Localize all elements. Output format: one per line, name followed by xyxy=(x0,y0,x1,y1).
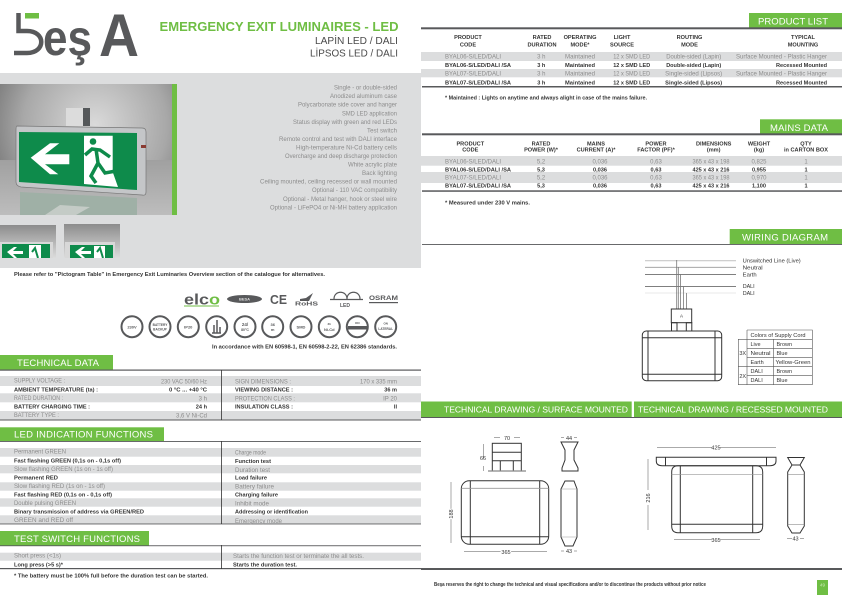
disclaimer: Beşa reserves the right to change the technical and visual specifications and/or to discontinue the products without prior notice xyxy=(434,582,706,588)
panel: mains data: MAINS xyxy=(587,141,605,147)
dimensions: 188 xyxy=(449,509,455,519)
feature list: Overcharge and deep discharge protection xyxy=(285,154,397,160)
panel: product list: 12 x SMD LED xyxy=(613,72,651,78)
wire labels: DALI xyxy=(743,291,755,297)
dimensions: 43 xyxy=(566,549,572,555)
panel: mains data: 1 xyxy=(804,184,808,190)
panel: mains data: POWER xyxy=(645,141,667,147)
supply cord colour table: DALI xyxy=(750,369,763,375)
supply cord colour table: Blue xyxy=(776,351,788,357)
panel: technical data: AMBIENT TEMPERATURE (ta) : xyxy=(14,388,98,394)
panel: technical data: 0 °C ... +40 °C xyxy=(169,388,207,394)
panel: mains data: BYAL06-S/LED/DALI xyxy=(445,160,501,166)
panel: mains data: 1 xyxy=(804,175,808,181)
panel: product list: 12 x SMD LED xyxy=(613,63,650,69)
panel: LED indication functions: Charging failure xyxy=(235,493,278,499)
panel: LED indication functions: Slow flashing RED (1s on - 1s off) xyxy=(14,484,105,490)
panel: LED indication functions: Inhibit mode xyxy=(235,502,270,508)
panel: mains data: PRODUCT xyxy=(456,141,485,147)
dimensions xyxy=(449,436,577,556)
panel: mains data: 0,036 xyxy=(593,184,607,190)
panel: product list: Surface Mounted - Plastic Hanger xyxy=(736,72,827,78)
panel: product list: MODE xyxy=(681,42,698,48)
panel: technical data: RATED DURATION : xyxy=(14,396,63,402)
panel: mains data: 0,036 xyxy=(593,167,607,173)
feature list: Anodized aluminum case xyxy=(330,94,398,100)
panel: mains data: RATED xyxy=(532,141,550,147)
panel: technical data: SUPPLY VOLTAGE : xyxy=(14,379,65,385)
panel: test switch functions: Starts the duration test. xyxy=(233,562,297,568)
panel: mains data: 0,63 xyxy=(650,175,662,181)
title: LİPSOS LED / DALI xyxy=(310,46,398,60)
panel: mains data: QTY xyxy=(800,141,812,147)
panel: technical data: 230 VAC 50/60 Hz xyxy=(161,380,207,386)
panel: mains data: 1 xyxy=(804,160,808,166)
heading: product list: PRODUCT LIST xyxy=(758,16,828,28)
battery footnote: * The battery must be 100% full before the duration test can be started. xyxy=(14,574,208,580)
heading: LED indication functions xyxy=(0,427,164,441)
panel: product list: Recessed Mounted xyxy=(776,80,828,86)
panel: product list: DURATION xyxy=(527,42,557,48)
heading: technical drawing surface mounted xyxy=(421,402,632,417)
pictogram icons: ON xyxy=(383,322,388,326)
panel: product list: BYAL07-S/LED/DALI /SA xyxy=(445,80,511,86)
feature list: Status display with green and red LEDs xyxy=(293,120,397,126)
panel: product list: Single-sided (Lipsos) xyxy=(665,72,722,78)
supply cord colour table: Neutral xyxy=(750,351,770,357)
wiring schematic xyxy=(642,260,736,381)
panel: mains data: (mm) xyxy=(707,147,721,153)
panel: product list: Maintained xyxy=(565,80,596,86)
dimensions: 43 xyxy=(792,536,799,542)
panel: mains data: 1,100 xyxy=(752,184,766,190)
panel: mains data: DIMENSIONS xyxy=(696,141,732,147)
panel: LED indication functions xyxy=(0,427,421,525)
panel: mains data: BYAL07-S/LED/DALI xyxy=(445,175,501,181)
product photo xyxy=(0,84,177,215)
panel: product list xyxy=(421,13,842,102)
panel: LED indication functions: Charge mode xyxy=(235,451,267,457)
panel: technical data: II xyxy=(394,405,397,411)
dimensions: 216 xyxy=(646,493,652,503)
technical drawing: surface mounted xyxy=(449,436,578,556)
panel: mains data: 0,63 xyxy=(650,160,662,166)
pictogram icons: IP20 xyxy=(184,324,193,330)
panel: product list: MOUNTING xyxy=(788,42,818,48)
heading: technical drawing recessed mounted xyxy=(634,402,842,417)
pictogram icons: ON xyxy=(355,321,360,325)
panel: technical data xyxy=(0,355,421,420)
wire labels: DALI xyxy=(743,284,755,290)
panel: mains data: BYAL06-S/LED/DALI /SA xyxy=(445,167,511,173)
pictogram icons: BATTERY xyxy=(153,323,168,327)
pictogram icons: BACKUP xyxy=(153,328,168,332)
panel: product list: TYPICAL xyxy=(791,35,816,41)
panel: LED indication functions: Function test xyxy=(235,459,271,465)
panel: technical data: SIGN DIMENSIONS : xyxy=(235,380,291,386)
panel: LED indication functions: Battery failure xyxy=(235,485,275,491)
panel: LED indication functions: Load failure xyxy=(235,476,267,482)
feature list: SMD LED application xyxy=(342,111,397,117)
panel: LED indication functions: Addressing or identification xyxy=(235,509,309,515)
panel: mains data: (kg) xyxy=(754,147,764,153)
panel: LED indication functions: GREEN and RED off xyxy=(14,518,73,524)
dimensions: 70 xyxy=(504,436,510,442)
feature list: Polycarbonate side cover and hanger xyxy=(298,103,397,109)
panel: technical data: 3,6 V Ni-Cd xyxy=(176,413,207,419)
certification logos: elc o xyxy=(184,292,220,308)
panel: mains data: * Measured under 230 V mains. xyxy=(445,200,530,206)
panel: mains data: WEIGHT xyxy=(748,141,771,147)
panel: mains data: 365 x 43 x 198 xyxy=(692,160,730,166)
panel: technical data: 3 h xyxy=(199,396,207,402)
panel: mains data: 0,63 xyxy=(651,167,661,173)
panel: product list: BYAL06-S/LED/DALI xyxy=(445,54,501,60)
pictogram icons: Ni-Cd xyxy=(324,327,335,332)
panel: mains data: 5,2 xyxy=(537,175,546,181)
panel: product list: ROUTING xyxy=(677,35,702,41)
title xyxy=(160,19,398,60)
pictogram icons xyxy=(122,316,396,337)
panel: product list: BYAL06-S/LED/DALI /SA xyxy=(445,63,511,69)
panel: mains data: BYAL07-S/LED/DALI /SA xyxy=(445,184,511,190)
pictogram icons: 3h xyxy=(328,322,331,326)
panel: product list: 3 h xyxy=(537,63,546,69)
wire labels: Neutral xyxy=(743,266,763,272)
supply cord colour table xyxy=(738,330,812,385)
supply cord colour table: Brown xyxy=(776,369,792,375)
feature list: White acrylic plate xyxy=(348,163,398,169)
panel: wiring diagram xyxy=(422,229,842,385)
panel: product list: BYAL07-S/LED/DALI xyxy=(445,72,501,78)
pictogram icons: 80°C xyxy=(241,328,249,332)
panel: mains data: POWER (W)* xyxy=(524,147,559,153)
panel: technical data: 170 x 335 mm xyxy=(360,380,397,386)
panel: product list: Maintained xyxy=(565,63,596,69)
panel: technical data: BATTERY CHARGING TIME : xyxy=(14,405,90,411)
dimensions: 44 xyxy=(566,436,572,442)
heading: test switch functions xyxy=(0,531,149,546)
panel: product list: Double-sided (Lapin) xyxy=(666,54,721,60)
logo: Beşa xyxy=(14,2,139,69)
supply cord colour table: Earth xyxy=(750,360,764,366)
panel: technical data: INSULATION CLASS : xyxy=(235,405,293,411)
panel: mains data: 425 x 43 x 216 xyxy=(692,184,730,190)
panel: product list: Surface Mounted - Plastic Hanger xyxy=(736,54,827,60)
panel: product list: * Maintained : Lights on anytime and always alight in case of the mains failure. xyxy=(445,96,647,102)
panel: grey product panel xyxy=(0,73,421,268)
panel: product list: CODE xyxy=(460,42,476,48)
thumbnail: recessed mounted xyxy=(64,224,120,258)
panel: product list: SOURCE xyxy=(610,42,634,48)
panel: product list: Double-sided (Lapin) xyxy=(666,63,721,69)
heading: mains data xyxy=(760,119,842,134)
pictogram icons: 24/ xyxy=(242,322,249,327)
pictogram icons: SMD xyxy=(297,324,306,330)
heading: technical data: TECHNICAL DATA xyxy=(17,358,100,369)
heading: LED indication functions: LED INDICATION FUNCTIONS xyxy=(14,430,153,440)
panel: mains data: 365 x 43 x 198 xyxy=(692,175,730,181)
panel: test switch functions: Starts the function test or terminate the all tests. xyxy=(233,554,364,560)
pictogram icons: m xyxy=(271,327,275,332)
heading: technical drawing recessed mounted: TECHNICAL DRAWING / RECESSED MOUNTED xyxy=(638,404,828,414)
heading: technical data xyxy=(0,355,113,370)
supply cord colour table: Blue xyxy=(776,378,788,384)
panel: LED indication functions: Permanent GREEN xyxy=(14,450,66,456)
panel: product list: Maintained xyxy=(565,54,595,60)
certification logos: RoHS xyxy=(295,302,318,308)
heading: product list xyxy=(749,13,842,28)
panel: test switch functions: Short press (<1s) xyxy=(14,553,61,559)
supply cord colour table: 2X xyxy=(739,374,746,380)
panel: product list: LIGHT xyxy=(614,35,631,41)
dimensions: 365 xyxy=(711,538,721,544)
panel: mains data: 0,970 xyxy=(751,175,767,181)
panel: test switch functions: Long press (>5 s)* xyxy=(14,562,64,568)
heading: wiring diagram: WIRING DIAGRAM xyxy=(742,232,828,244)
panel: technical data: VIEWING DISTANCE : xyxy=(235,388,293,394)
panel: mains data: 0,63 xyxy=(651,184,661,190)
panel: product list: MODE* xyxy=(571,42,590,48)
certification logos xyxy=(184,292,398,309)
certification logos: OSRAM xyxy=(369,295,398,302)
panel: product list: 3 h xyxy=(537,80,546,86)
panel: mains data: in CARTON BOX xyxy=(784,147,828,153)
panel: mains data: 0,955 xyxy=(752,167,766,173)
dimensions: 365 xyxy=(501,550,511,556)
dimensions: 425 xyxy=(711,446,721,452)
panel: LED indication functions: Slow flashing GREEN (1s on - 1s off) xyxy=(14,467,113,473)
pictogram icons: 230V xyxy=(127,324,137,330)
feature list: Optional - LiFePO4 or Ni-MH battery application xyxy=(270,205,397,211)
panel: LED indication functions: Fast flashing RED (0,1s on - 0,1s off) xyxy=(14,493,112,499)
panel: technical data: 36 m xyxy=(384,388,397,394)
panel: mains data: 5,3 xyxy=(537,167,545,173)
panel: product list: Single-sided (Lipsos) xyxy=(665,80,722,86)
dimensions: 66 xyxy=(480,456,486,462)
heading: test switch functions: TEST SWITCH FUNCTIONS xyxy=(14,534,140,545)
panel: product list: RATED xyxy=(533,35,551,41)
wire labels xyxy=(743,258,801,297)
page number: 49 xyxy=(820,582,825,588)
panel: technical data: BATTERY TYPE : xyxy=(14,413,59,419)
panel: LED indication functions: Binary transmission of address via GREEN/RED xyxy=(14,509,144,515)
logo: Beşa: A xyxy=(99,2,139,69)
technical drawing: recessed mounted xyxy=(646,446,804,544)
heading: technical drawing surface mounted: TECHNICAL DRAWING / SURFACE MOUNTED xyxy=(444,404,628,414)
panel: technical data: IP 20 xyxy=(383,396,398,402)
panel: test switch functions xyxy=(0,531,421,569)
supply cord colour table: DALI xyxy=(750,378,763,384)
panel: product list: 3 h xyxy=(537,72,545,78)
panel: LED indication functions: Duration test xyxy=(235,468,270,474)
panel: product list: 12 x SMD LED xyxy=(613,80,650,86)
feature list: Ceiling mounted, ceiling recessed or wall mounted xyxy=(260,180,397,186)
supply cord colour table: Brown xyxy=(776,342,792,348)
panel: LED indication functions: Fast flashing GREEN (0,1s on - 0,1s off) xyxy=(14,459,121,465)
feature list: High-temperature Ni-Cd battery cells xyxy=(296,146,397,152)
panel: product list: OPERATING xyxy=(564,35,596,41)
panel: mains data: 0,036 xyxy=(592,175,608,181)
pictogram note: Please refer to "Pictogram Table" in Emergency Exit Luminaries Overview section of the catalogue for alternatives. xyxy=(14,272,325,278)
panel: product list: Recessed Mounted xyxy=(776,63,828,69)
supply cord colour table: Colors of Supply Cord xyxy=(750,333,806,339)
certification logos: BESA xyxy=(239,296,250,302)
panel: mains data: 425 x 43 x 216 xyxy=(692,167,730,173)
supply cord colour table: Yellow-Green xyxy=(776,360,810,366)
certification logos: CE xyxy=(270,293,287,307)
panel: product list: 3 h xyxy=(537,54,545,60)
title: LAPİN LED / DALI xyxy=(315,34,398,47)
panel: mains data: CURRENT (A)* xyxy=(577,147,616,153)
page number xyxy=(817,580,828,595)
panel: LED indication functions: Emergency mode xyxy=(235,519,283,525)
feature list: Optional - 110 VAC compatibility xyxy=(312,188,397,194)
standards note: In accordance with EN 60598-1, EN 60598-2-22, EN 62386 standards. xyxy=(212,344,397,350)
panel: mains data: FACTOR (PF)* xyxy=(637,147,676,153)
feature list: Remote control and test with DALI interface xyxy=(279,137,398,143)
wiring schematic: A xyxy=(680,314,683,318)
supply cord colour table: 3X xyxy=(739,351,746,357)
pictogram icons: 36 xyxy=(270,322,276,327)
feature list: Back lighting xyxy=(362,171,397,177)
dimensions xyxy=(646,446,804,544)
title: EMERGENCY EXIT LUMINAIRES - LED xyxy=(160,19,398,34)
panel: mains data: 1 xyxy=(804,167,808,173)
heading: mains data: MAINS DATA xyxy=(770,123,829,134)
panel: product list: Maintained xyxy=(565,72,595,78)
panel: mains data: 0,036 xyxy=(592,160,608,166)
panel: product list: 12 x SMD LED xyxy=(613,54,651,60)
panel: mains data: CODE xyxy=(462,147,479,153)
panel: mains data: 5,2 xyxy=(537,160,546,166)
footer rule xyxy=(421,568,842,570)
panel: mains data: 0,825 xyxy=(751,160,767,166)
feature list: Optional - Metal hanger, hook or steel wire xyxy=(283,197,398,203)
panel: LED indication functions: Double pulsing GREEN xyxy=(14,501,76,507)
panel: mains data xyxy=(421,119,842,206)
logo: Beşa: eş xyxy=(43,10,92,66)
panel: mains data: 5,3 xyxy=(537,184,545,190)
panel: technical data: PROTECTION CLASS : xyxy=(235,396,295,402)
panel: technical data: 24 h xyxy=(196,405,208,411)
pictogram icons: LATERAL xyxy=(378,327,393,331)
feature list: Single - or double-sided xyxy=(334,86,397,92)
panel: product list: PRODUCT xyxy=(454,35,482,41)
feature list xyxy=(260,86,398,211)
heading: wiring diagram xyxy=(730,229,842,244)
wire labels: Earth xyxy=(743,272,757,278)
certification logos: LED xyxy=(340,303,350,309)
panel: LED indication functions: Permanent RED xyxy=(14,476,58,482)
supply cord colour table: Live xyxy=(750,342,761,348)
feature list: Test switch xyxy=(367,128,397,134)
thumbnail: surface mounted xyxy=(0,225,56,258)
wire labels: Unswitched Line (Live) xyxy=(743,258,801,264)
